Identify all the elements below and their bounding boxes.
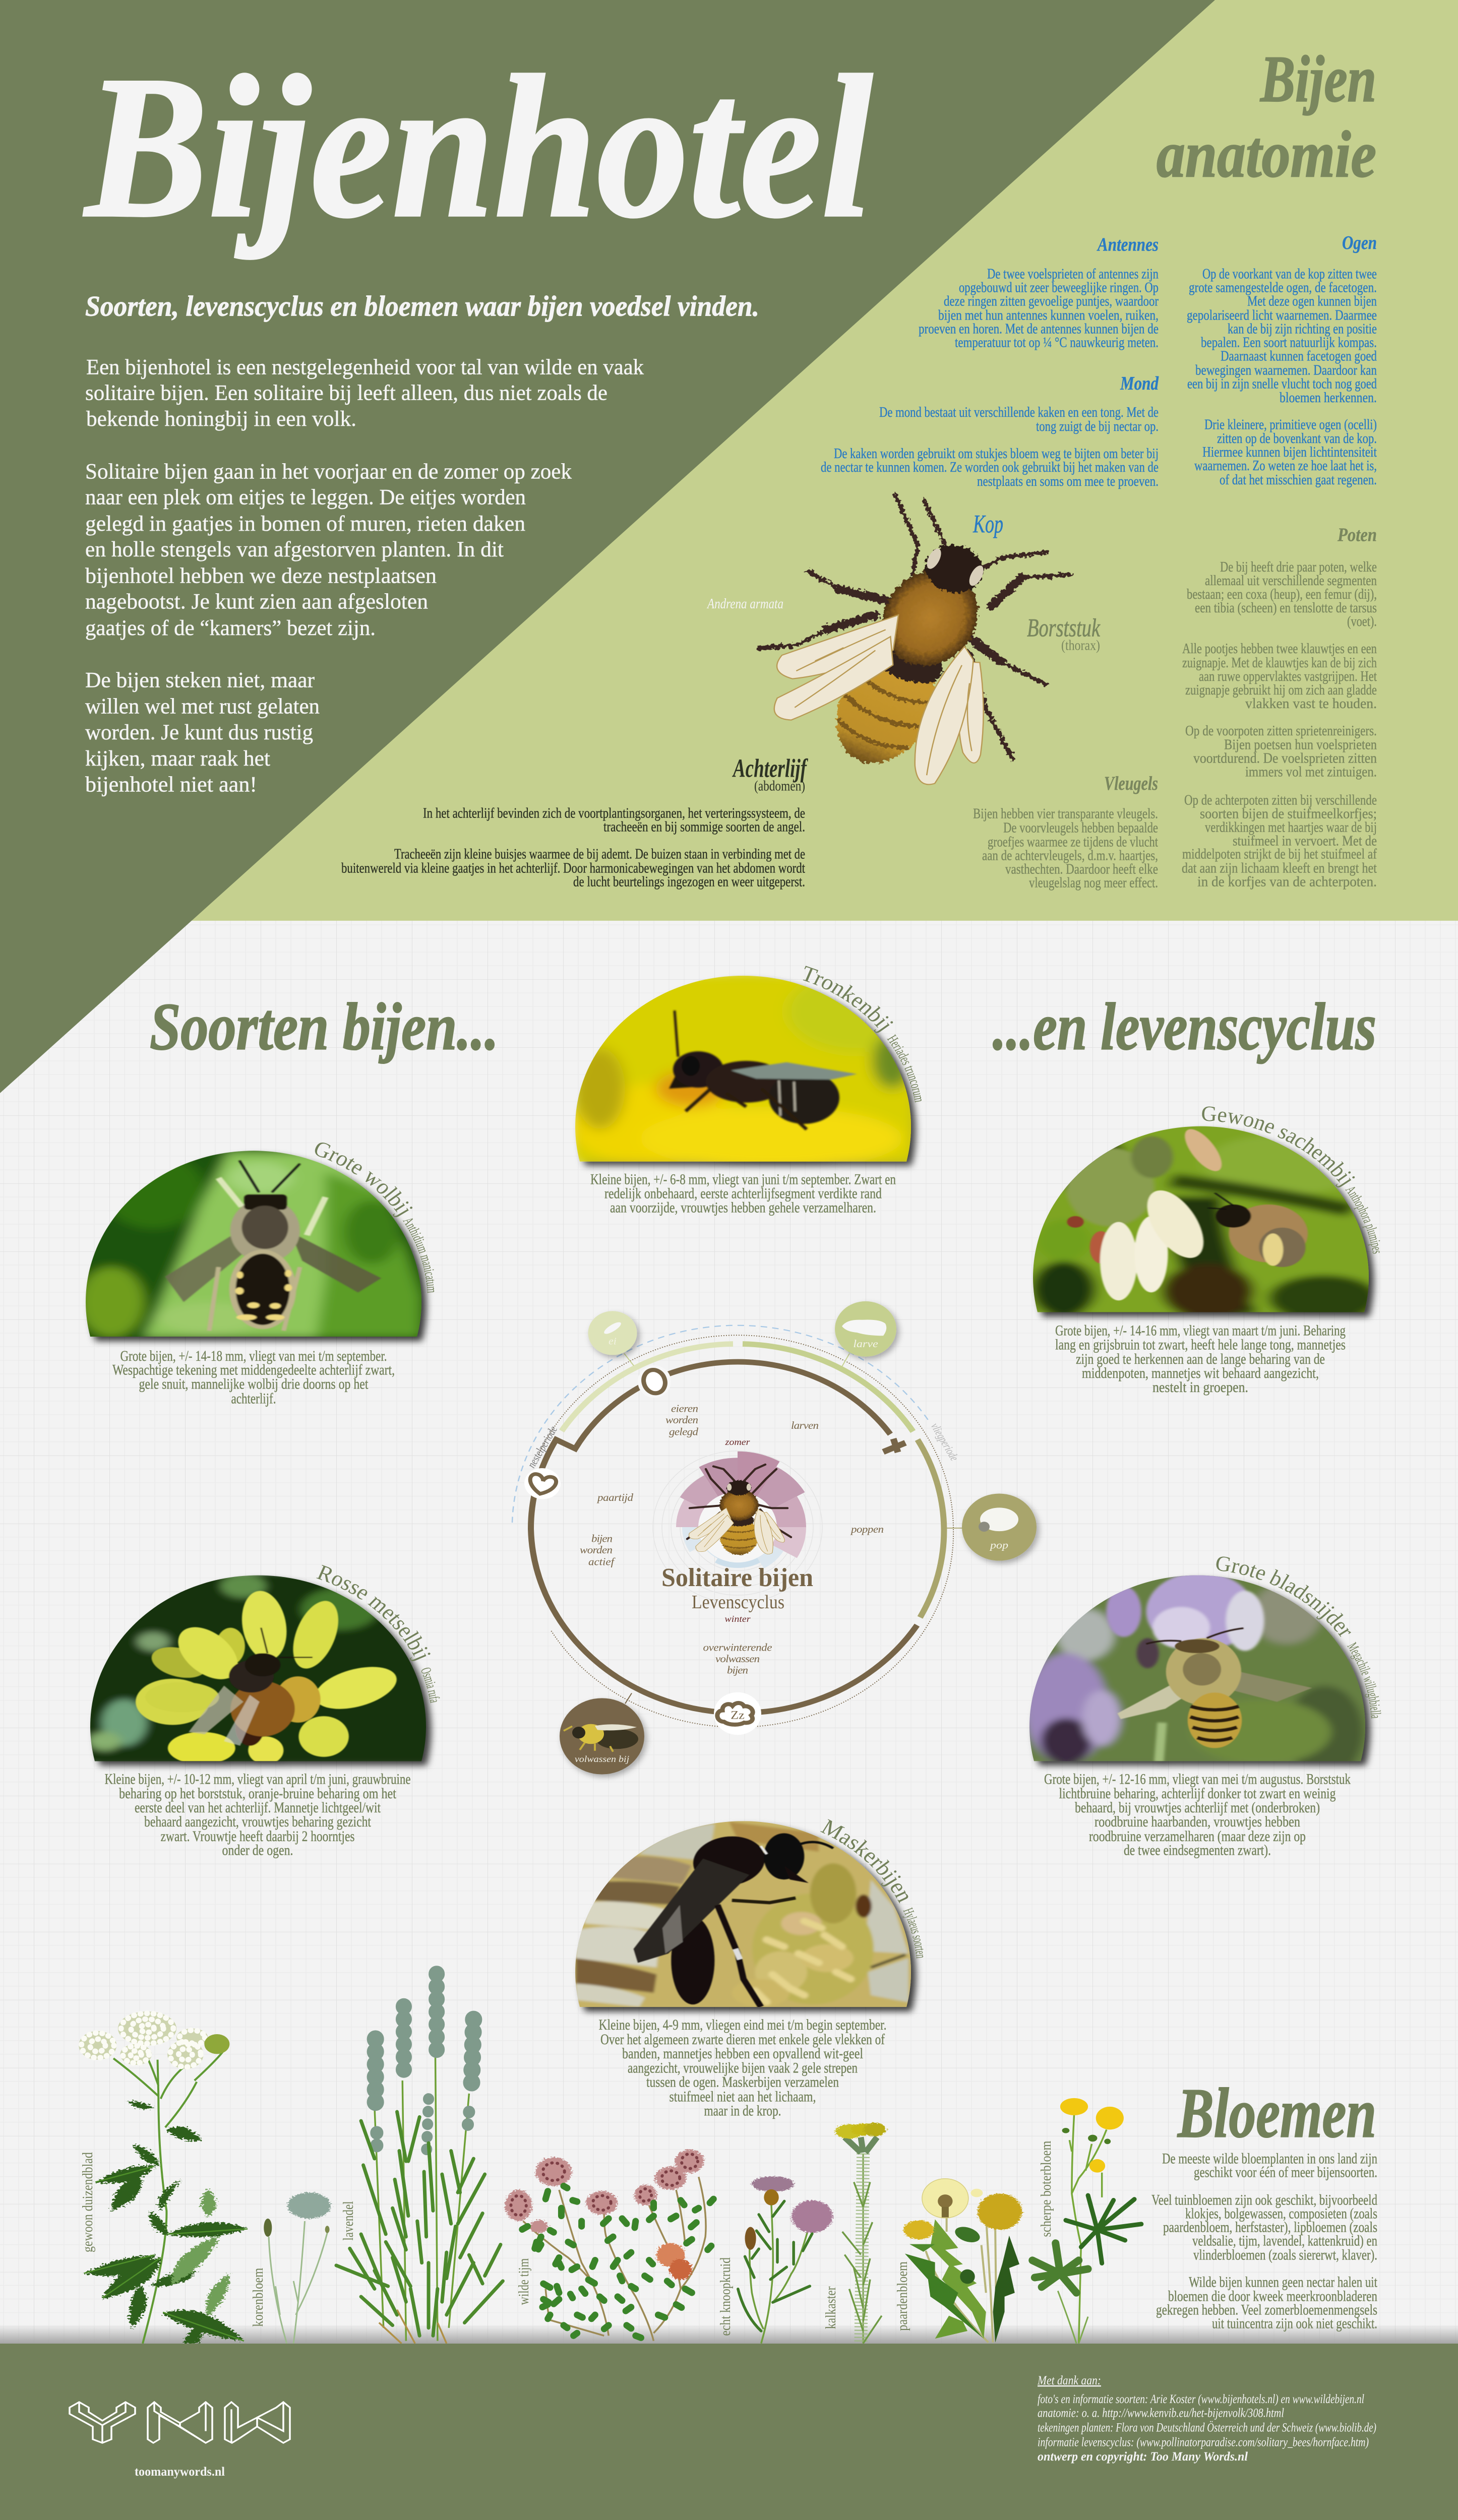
intro text block: nagebootst. Je kunt zien aan afgesloten — [85, 589, 428, 613]
text block: Mond: Mond — [1120, 372, 1159, 394]
label: Kop: Kop — [973, 510, 1003, 538]
text block: credits: anatomie: o. a. http://www.kenvib.eu/het-bijenvolk/308.html — [1038, 2406, 1284, 2420]
plant labels: echt knoopkruid — [717, 2257, 733, 2336]
text block: Ogen: zitten op de bovenkant van de kop. — [1217, 430, 1377, 447]
name: Gewone sachembij — [1200, 1101, 1386, 1254]
icon: egg bubble ei: ei — [609, 1335, 617, 1347]
text block: Ogen — [1187, 232, 1377, 488]
caption: Grote wolbij: achterlijf. — [231, 1390, 276, 1407]
panel: anatomy background — [0, 0, 1458, 921]
text block: Bloemen: Wilde bijen kunnen geen nectar halen uit — [1189, 2274, 1377, 2290]
text block: Poten: Alle pootjes hebben twee klauwtjes en een — [1182, 640, 1377, 657]
caption: Maskerbijen: aangezicht, vrouwelijke bijen vaak 2 gele strepen — [628, 2059, 858, 2076]
footer fade — [0, 2324, 1458, 2344]
plant: gewoon duizendblad — [79, 2011, 248, 2344]
icon: egg marker — [638, 1365, 671, 1398]
caption: Maskerbijen: tussen de ogen. Maskerbijen verzamelen — [646, 2073, 839, 2090]
caption: Rosse metselbij: behaard aangezicht, vrouwtjes beharing gezicht — [144, 1813, 371, 1830]
text block: Vleugels — [973, 773, 1158, 891]
name: Maskerbijen: Maskerbijen — [817, 1814, 919, 1906]
text block: Poten: allemaal uit verschillende segmenten — [1205, 572, 1377, 589]
icon: larva bubble — [835, 1301, 896, 1357]
caption: Gewone sachembij — [1055, 1322, 1346, 1396]
label: winter: winter — [724, 1614, 751, 1624]
illustration: anatomy bee — [730, 469, 1106, 812]
label: zomer: zomer — [725, 1437, 750, 1447]
name: Rosse metselbij: Osmia rufa — [417, 1665, 444, 1704]
text block: Achterlijf: buitenwereld via kleine gaatjes in het achterlijf. Door harmonicabewegingen van het abdomen wordt — [341, 860, 805, 876]
panel: intro diagonal — [0, 0, 1215, 1093]
name: Tronkenbij: Heriades truncorum — [887, 1034, 922, 1103]
heading: Bloemen: Bloemen — [1177, 2074, 1376, 2153]
text block: Poten: verdikkingen met haartjes waar de bij — [1205, 819, 1377, 835]
text block: Mond: tong zuigt de bij nectar op. — [1036, 418, 1159, 434]
text block: Antennes: proeven en horen. Met de antennes kunnen bijen de — [919, 321, 1159, 337]
text block: Poten: aan ruwe oppervlaktes vastgrijpen. Het — [1199, 668, 1377, 684]
text block: Poten: Op de voorpoten zitten sprietenreinigers. — [1185, 722, 1377, 738]
text block: Poten: De bij heeft drie paar poten, welke — [1220, 558, 1377, 575]
text block: Mond: de nectar te kunnen komen. Ze worden ook gebruikt bij het maken van de — [821, 459, 1159, 475]
text block: Vleugels: vleugelslag nog meer effect. — [1029, 874, 1158, 891]
arc: winter body ring and inner summer ring — [531, 1362, 917, 1713]
text block: Poten: middelpoten strijkt de bij het stuifmeel af — [1182, 846, 1377, 862]
text block: Poten: zuignapje. Met de klauwtjes kan de bij zich — [1182, 654, 1377, 670]
intro text block: bekende honingbij in een volk. — [86, 406, 356, 430]
text block: Ogen: grote samengestelde ogen, de facetogen. — [1189, 279, 1377, 295]
text block: Bloemen: klokjes, bolgewassen, composieten (zoals — [1185, 2205, 1377, 2222]
labels: cycle stages: bijen — [591, 1533, 613, 1544]
intro text block: solitaire bijen. Een solitaire bij leeft alleen, dus niet zoals de — [85, 381, 608, 405]
caption: Grote bladsnijder: roodbruine verzamelharen (maar deze zijn op — [1089, 1828, 1306, 1844]
text block: Vleugels: De voorvleugels hebben bepaalde — [1003, 820, 1158, 836]
text block: Bloemen: uit tuincentra zijn ook niet geschikt. — [1212, 2315, 1377, 2332]
label: Achterlijf: Achterlijf — [732, 753, 808, 783]
text block: Ogen: bloemen herkennen. — [1280, 390, 1377, 406]
caption: Grote bladsnijder: de twee eindsegmenten zwart). — [1124, 1842, 1271, 1858]
plant: wilde tijm — [505, 2150, 713, 2341]
caption: Rosse metselbij: onder de ogen. — [222, 1842, 293, 1858]
name: Tronkenbij: Tronkenbij — [803, 966, 893, 1033]
text block: Ogen: Drie kleinere, primitieve ogen (ocelli) — [1204, 416, 1377, 432]
text block: Poten: vlakken vast te houden. — [1245, 695, 1377, 711]
intro text block: bijenhotel hebben we deze nestplaatsen — [85, 563, 437, 588]
labels: cycle stages: larven — [791, 1420, 819, 1431]
pie: seasonal wedges — [653, 1451, 822, 1603]
text block: Poten: bestaan; een coxa (heup), een femur (dij), — [1187, 586, 1377, 602]
text block: Mond — [821, 372, 1159, 489]
icon: larva bubble: larve — [853, 1338, 878, 1350]
intro text block: Een bijenhotel is een nestgelegenheid voor tal van wilde en vaak — [86, 355, 644, 379]
name: Tronkenbij — [798, 961, 928, 1103]
label: Borststuk: (thorax) — [1061, 637, 1100, 653]
caption: Maskerbijen: Over het algemeen zwarte dieren met enkele gele vlekken of — [600, 2031, 885, 2048]
label: vliegperiode: vliegperiode — [928, 1421, 961, 1463]
caption: Grote bladsnijder: roodbruine haarbanden, vrouwtjes hebben — [1095, 1813, 1300, 1830]
text block: Bloemen: geschikt voor één of meer bijensoorten. — [1194, 2164, 1377, 2180]
text block: Ogen: waarnemen. Zo weten ze hoe laat het is, — [1194, 458, 1377, 474]
plant labels: wilde tijm — [516, 2258, 531, 2305]
caption: Rosse metselbij: zwart. Vrouwtje heeft daarbij 2 hoorntjes — [160, 1828, 355, 1844]
text block: Achterlijf: de lucht beurtelings ingezogen en weer uitgeperst. — [573, 873, 805, 890]
text block: Antennes: opgebouwd uit zeer beweeglijke ringen. Op — [959, 279, 1159, 295]
text block: Bloemen: bloemen die door kweek meerkroonbladeren — [1168, 2288, 1377, 2304]
name: Gewone sachembij: Gewone sachembij — [1202, 1106, 1355, 1187]
text block: Vleugels: vasthechten. Daardoor heeft elke — [1005, 861, 1158, 877]
text block: Poten: dat aan zijn lichaam kleeft en brengt het — [1182, 860, 1377, 876]
text block: Ogen: een bij in zijn snelle vlucht toch nog goed — [1187, 375, 1377, 392]
plant labels: scherpe boterbloem — [1038, 2140, 1054, 2237]
heading: Soorten bijen: Soorten bijen... — [150, 990, 499, 1064]
caption: Tronkenbij — [590, 1171, 896, 1216]
intro text block: Solitaire bijen gaan in het voorjaar en de zomer op zoek — [85, 459, 572, 483]
text block: Ogen: Ogen — [1342, 232, 1377, 254]
text block: Antennes: Antennes — [1097, 234, 1159, 255]
text block: Poten: (voet). — [1347, 613, 1377, 629]
intro text block: naar een plek om eitjes te leggen. De eitjes worden — [85, 485, 526, 509]
plant: lavendel — [336, 1974, 503, 2344]
name: Rosse metselbij: Rosse metselbij — [314, 1560, 437, 1664]
subtitle: Soorten, levenscyclus en bloemen waar bijen voedsel vinden. — [85, 290, 759, 323]
photo: Tronkenbij — [570, 971, 928, 1170]
text block: Poten: stuifmeel in vervoert. Met de — [1233, 833, 1377, 849]
intro text block: gelegd in gaatjes in bomen of muren, rieten daken — [85, 511, 525, 535]
caption: Gewone sachembij: lang en grijsbruin tot zwart, heeft hele lange tong, mannetjes — [1055, 1336, 1346, 1353]
text block: Ogen: Hiermee kunnen bijen lichtintensiteit — [1202, 444, 1377, 460]
labels: cycle stages: bijen — [727, 1665, 748, 1676]
text block: Mond: De kaken worden gebruikt om stukjes bloem weg te bijten om beter bij — [834, 445, 1159, 462]
icon: sleep cloud — [714, 1692, 761, 1735]
text block: Ogen: gepolariseerd licht waarnemen. Daarmee — [1187, 307, 1377, 323]
subheading: Levenscyclus: Levenscyclus — [692, 1591, 784, 1613]
caption: Rosse metselbij: Kleine bijen, +/- 10-12 mm, vliegt van april t/m juni, grauwbruine — [104, 1771, 411, 1787]
caption: Grote bladsnijder: lichtbruine beharing, achterlijf donker tot zwart en weinig — [1059, 1785, 1336, 1802]
plant: korenbloem — [264, 2192, 331, 2344]
text block: Ogen: bewegingen waarnemen. Daardoor kan — [1195, 362, 1377, 378]
caption: Rosse metselbij — [104, 1771, 411, 1858]
heading: Solitaire bijen: Solitaire bijen — [661, 1563, 813, 1592]
text block: Vleugels: aan de achtervleugels, d.m.v. haartjes, — [982, 847, 1158, 863]
text block: Poten: een tibia (scheen) en tenslotte de tarsus — [1195, 599, 1377, 616]
intro text block: en holle stengels van afgestorven planten. In dit — [85, 537, 504, 561]
text block: Achterlijf: In het achterlijf bevinden zich de voortplantingsorganen, het verteringssysteem, de — [423, 805, 805, 821]
text block: Bloemen: vlinderbloemen (zoals siererwt, klaver). — [1193, 2246, 1377, 2263]
labels: cycle stages — [580, 1403, 884, 1676]
plant: paardenbloem — [903, 2179, 1022, 2343]
icon: pupa bubble — [962, 1493, 1037, 1561]
heading: Bijen anatomie: Bijen — [1260, 42, 1376, 116]
label: Achterlijf: (abdomen) — [754, 778, 805, 794]
text block: Ogen: Met deze ogen kunnen bijen — [1247, 293, 1377, 309]
text block: Poten: Bijen poetsen hun voelsprieten — [1224, 736, 1377, 752]
name: Maskerbijen: Hylaeus soorten — [900, 1906, 930, 1959]
text block: Antennes — [919, 234, 1159, 350]
labels: cycle stages: overwinterende — [703, 1642, 772, 1653]
caption: Grote bladsnijder — [1044, 1771, 1351, 1858]
text block: Mond: De mond bestaat uit verschillende kaken en een tong. Met de — [879, 404, 1159, 420]
icon: heart marker — [521, 1465, 564, 1502]
label: Borststuk: Borststuk — [1027, 614, 1101, 642]
text block: Mond: nestplaats en soms om mee te proeven. — [977, 473, 1159, 489]
text block: Antennes: bijen met hun antennes kunnen voelen, ruiken, — [938, 307, 1159, 323]
intro text block: De bijen steken niet, maar — [85, 668, 315, 692]
text block: Ogen: kan de bij zijn richting en positie — [1228, 321, 1377, 337]
icon: adult bee bubble: volwassen bij — [575, 1754, 629, 1765]
text block: credits: Met dank aan: — [1037, 2373, 1101, 2387]
text block: Achterlijf: Tracheeën zijn kleine buisjes waarmee de bij ademt. De buizen staan in verbinding met de — [394, 846, 805, 862]
photo: Rosse metselbij — [83, 1572, 436, 1765]
caption: Tronkenbij: redelijk onbehaard, eerste achterlijfsegment verdikte rand — [604, 1185, 882, 1202]
caption: Tronkenbij: aan voorzijde, vrouwtjes hebben gehele verzamelharen. — [610, 1199, 876, 1216]
text block: Antennes: De twee voelsprieten of antennes zijn — [987, 266, 1159, 282]
text block: Ogen: Daarnaast kunnen facetogen goed — [1221, 348, 1377, 364]
text block: Poten — [1182, 524, 1377, 890]
plant: echt knoopkruid — [738, 2176, 832, 2344]
illustration: centre bee — [687, 1465, 791, 1555]
name: Grote wolbij — [310, 1136, 441, 1294]
photo: Maskerbijen — [567, 1817, 917, 2011]
plant labels: paardenbloem — [894, 2261, 910, 2331]
label: Borststuk — [1027, 614, 1101, 653]
icon: sleep cloud: Zz — [731, 1709, 745, 1722]
heading: Bijen anatomie — [1157, 42, 1376, 191]
caption: Gewone sachembij: zijn goed te herkennen aan de lange beharing van de — [1076, 1351, 1325, 1367]
plant labels: korenbloem — [250, 2267, 266, 2327]
caption: Gewone sachembij: nestelt in groepen. — [1152, 1378, 1248, 1396]
caption: Maskerbijen: Kleine bijen, 4-9 mm, vliegen eind mei t/m begin september. — [599, 2017, 887, 2033]
caption: Grote bladsnijder: behaard, bij vrouwtjes achterlijf met (onderbroken) — [1075, 1799, 1320, 1816]
text block: Bloemen — [1151, 2150, 1377, 2332]
caption: Rosse metselbij: eerste deel van het achterlijf. Mannetje lichtgeel/wit — [135, 1799, 381, 1816]
caption: Grote wolbij: Wespachtige tekening met middengedeelte achterlijf zwart, — [112, 1361, 395, 1378]
labels: cycle stages: paartijd — [596, 1492, 633, 1503]
plant: kalkaster — [835, 2123, 886, 2344]
labels: cycle stages: eieren — [671, 1403, 698, 1414]
text block: Vleugels: Vleugels — [1104, 773, 1158, 794]
icon: egg bubble ei — [588, 1311, 637, 1355]
caption: Maskerbijen: maar in de krop. — [704, 2102, 781, 2119]
photo: Grote wolbij — [85, 1150, 432, 1347]
name: Grote bladsnijder: Grote bladsnijder — [1213, 1551, 1360, 1642]
text block: Bloemen: veldsalie, tijm, lavendel, kattenkruid) en — [1192, 2232, 1377, 2249]
logo: YMW — [70, 2402, 290, 2443]
arc: pupa period — [918, 1439, 944, 1617]
text block: Antennes: temperatuur tot op ¼ °C nauwkeurig meten. — [955, 334, 1159, 350]
text block: credits — [1037, 2373, 1376, 2464]
caption: Gewone sachembij: middenpoten, mannetjes wit behaard aangezicht, — [1082, 1364, 1319, 1381]
text block: Achterlijf — [341, 805, 805, 890]
plant labels: lavendel — [340, 2201, 356, 2241]
text block: Antennes: deze ringen zitten gevoelige puntjes, waardoor — [944, 293, 1159, 309]
text block: Poten: in de korfjes van de achterpoten. — [1197, 873, 1377, 890]
label: nestelperiode: nestelperiode — [524, 1424, 560, 1470]
caption: Tronkenbij: Kleine bijen, +/- 6-8 mm, vliegt van juni t/m september. Zwart en — [590, 1171, 896, 1187]
text block: Poten: soorten bijen de stuifmeelkorfjes; — [1200, 805, 1377, 822]
text block: Ogen: bepalen. Een soort natuurlijk kompas. — [1201, 334, 1377, 350]
text block: Ogen: of dat het misschien gaat regenen. — [1220, 472, 1377, 488]
text block: Achterlijf: tracheeën en bij sommige soorten de angel. — [603, 818, 805, 835]
plant labels: gewoon duizendblad — [80, 2152, 95, 2252]
name: Grote bladsnijder: Megachile willughbiella — [1344, 1640, 1384, 1719]
caption: Grote wolbij: gele snuit, mannelijke wolbij drie doorns op het — [139, 1375, 369, 1392]
text block: Poten: voortdurend. De voelsprieten zitten — [1193, 750, 1377, 766]
chart: life cycle diagram — [512, 1301, 1037, 1775]
icon: adult bee bubble — [560, 1698, 644, 1775]
text block: Poten: Op de achterpoten zitten bij verschillende — [1184, 792, 1377, 808]
labels: cycle stages: gelegd — [669, 1426, 698, 1437]
intro text block: bijenhotel niet aan! — [85, 772, 257, 796]
title: Bijenhotel — [82, 34, 873, 260]
text block: credits: ontwerp en copyright: Too Many Words.nl — [1038, 2449, 1248, 2464]
text block: Vleugels: groefjes waarmee ze tijdens de vlucht — [988, 834, 1158, 850]
name: Maskerbijen — [817, 1814, 930, 1959]
labels: cycle stages: worden — [580, 1544, 613, 1556]
text block: Vleugels: Bijen hebben vier transparante vleugels. — [973, 805, 1158, 822]
arc: dotted outer ring — [538, 1335, 953, 1727]
text block: Poten: immers vol met zintuigen. — [1245, 764, 1377, 780]
labels: cycle stages: volwassen — [715, 1653, 760, 1665]
caption: Grote wolbij: Grote bijen, +/- 14-18 mm, vliegt van mei t/m september. — [120, 1347, 387, 1364]
caption: Maskerbijen — [599, 2017, 887, 2119]
arc: egg period — [562, 1344, 733, 1431]
label: Achterlijf — [732, 753, 808, 794]
text block: Poten: Poten — [1337, 524, 1377, 545]
arc: dashed blue ring — [512, 1326, 929, 1523]
plant labels: kalkaster — [823, 2286, 838, 2329]
labels: cycle stages: poppen — [850, 1524, 884, 1535]
caption: Maskerbijen: stuifmeel niet aan het lichaam, — [670, 2088, 816, 2105]
labels: cycle stages: worden — [665, 1414, 698, 1426]
intro text block: willen wel met rust gelaten — [85, 694, 320, 718]
heading: Bijen anatomie: anatomie — [1157, 118, 1376, 191]
icon: pupa bubble: pop — [989, 1539, 1008, 1551]
name: Gewone sachembij: Anthophora plumipes — [1343, 1183, 1386, 1254]
intro text block: worden. Je kunt dus rustig — [85, 720, 313, 744]
caption: Grote wolbij — [112, 1347, 395, 1407]
intro text block — [85, 355, 644, 796]
name: Grote wolbij: Grote wolbij — [315, 1143, 412, 1218]
name: Rosse metselbij — [314, 1560, 444, 1704]
text: toomanywords.nl: toomanywords.nl — [135, 2464, 225, 2478]
labels: cycle stages: actief — [588, 1556, 616, 1567]
text block: Poten: zuignapje gebruikt hij om zich aan gladde — [1185, 681, 1377, 698]
intro text block: kijken, maar raak het — [85, 746, 270, 771]
photo: Grote bladsnijder — [1022, 1572, 1373, 1778]
intro text block: gaatjes of de “kamers” bezet zijn. — [85, 615, 376, 640]
name: Grote bladsnijder — [1213, 1551, 1384, 1719]
plant: scherpe boterbloem — [1032, 2098, 1141, 2344]
label: Andrena armata: Andrena armata — [706, 595, 783, 611]
panel: footer — [0, 2344, 1458, 2520]
caption: Rosse metselbij: beharing op het borststuk, oranje-bruine beharing om het — [119, 1785, 396, 1802]
photo: Gewone sachembij — [1017, 1120, 1389, 1321]
caption: Maskerbijen: banden, mannetjes hebben een opvallend wit-geel — [622, 2045, 863, 2061]
connector lines — [624, 1353, 849, 1366]
icon: cross marker — [883, 1439, 905, 1453]
name: Grote wolbij: Anthidium manicatum — [403, 1219, 435, 1293]
text block: Ogen: Op de voorkant van de kop zitten twee — [1202, 266, 1377, 282]
arc: larva period — [743, 1344, 913, 1431]
plant labels — [80, 2140, 1054, 2336]
